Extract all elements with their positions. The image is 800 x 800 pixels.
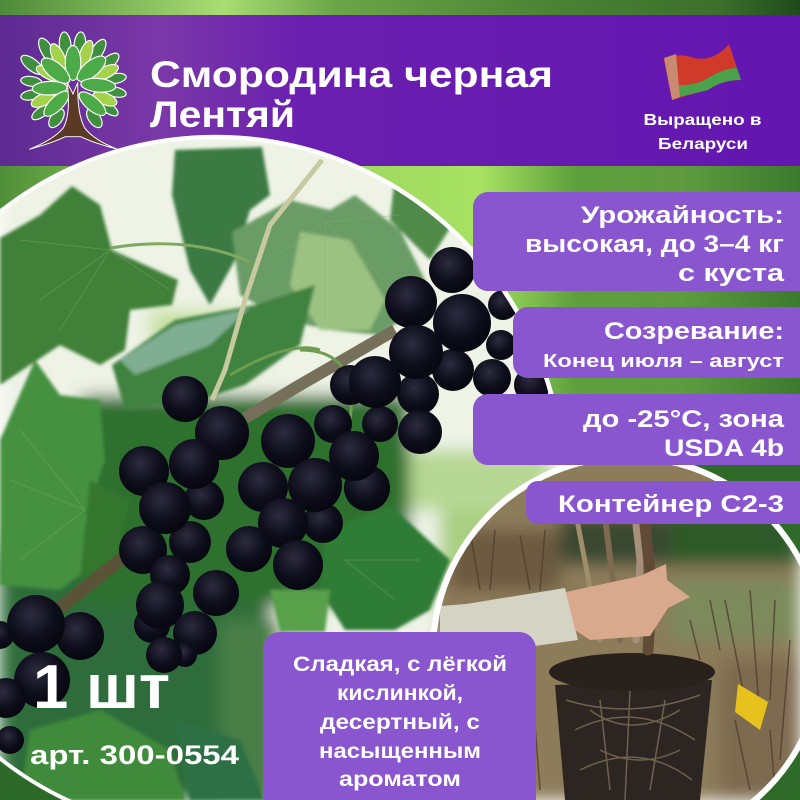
panel: ripening: Конец июля – август (543, 350, 784, 371)
leaves (0, 147, 455, 800)
photo backdrop (430, 450, 800, 800)
main photo: currant branch (0, 130, 566, 800)
photo backdrop (0, 130, 560, 800)
caption: grown in Belarus: Выращено в (644, 112, 762, 129)
quantity label: 1 шт (33, 653, 170, 722)
logo: tree (18, 31, 127, 149)
panel: hardiness: до -25°С, зона (583, 406, 785, 433)
panel: hardiness: USDA 4b (664, 435, 784, 462)
icon: Belarus flag (664, 44, 741, 100)
panel: yield: высокая, до 3–4 кг (525, 231, 784, 258)
panel: taste description: кислинкой, (337, 682, 463, 705)
panel: taste description: Сладкая, с лёгкой (293, 653, 507, 676)
container pot with roots (549, 653, 715, 800)
panel: taste description: ароматом (339, 768, 461, 791)
panel: ripening: Созревание: (604, 318, 784, 345)
panel: container (526, 481, 800, 524)
title: Лентяй (150, 94, 295, 135)
hand and sleeve (440, 564, 690, 655)
header band (0, 15, 800, 166)
stems (578, 525, 652, 650)
berries (0, 247, 550, 754)
title: Смородина черная (150, 54, 553, 95)
panel: container: Контейнер С2-3 (558, 491, 784, 518)
panel: ripening (513, 307, 800, 378)
yellow tag (735, 684, 768, 730)
leaf veins (10, 215, 420, 600)
panel: taste description: насыщенным (319, 740, 481, 763)
panel: yield: Урожайность: (581, 202, 784, 229)
container photo (430, 450, 800, 800)
article number: арт. 300-0554 (30, 740, 239, 770)
panel: taste description: десертный, с (320, 711, 480, 734)
panel: taste description (263, 632, 536, 800)
caption: grown in Belarus: Беларуси (658, 136, 748, 153)
panel: yield: с куста (678, 260, 785, 287)
panel: yield (473, 192, 800, 291)
stems and branch (60, 160, 395, 608)
dry twigs (460, 530, 790, 790)
title (150, 54, 553, 135)
caption: grown in Belarus (644, 112, 762, 153)
panel: hardiness (473, 394, 800, 465)
